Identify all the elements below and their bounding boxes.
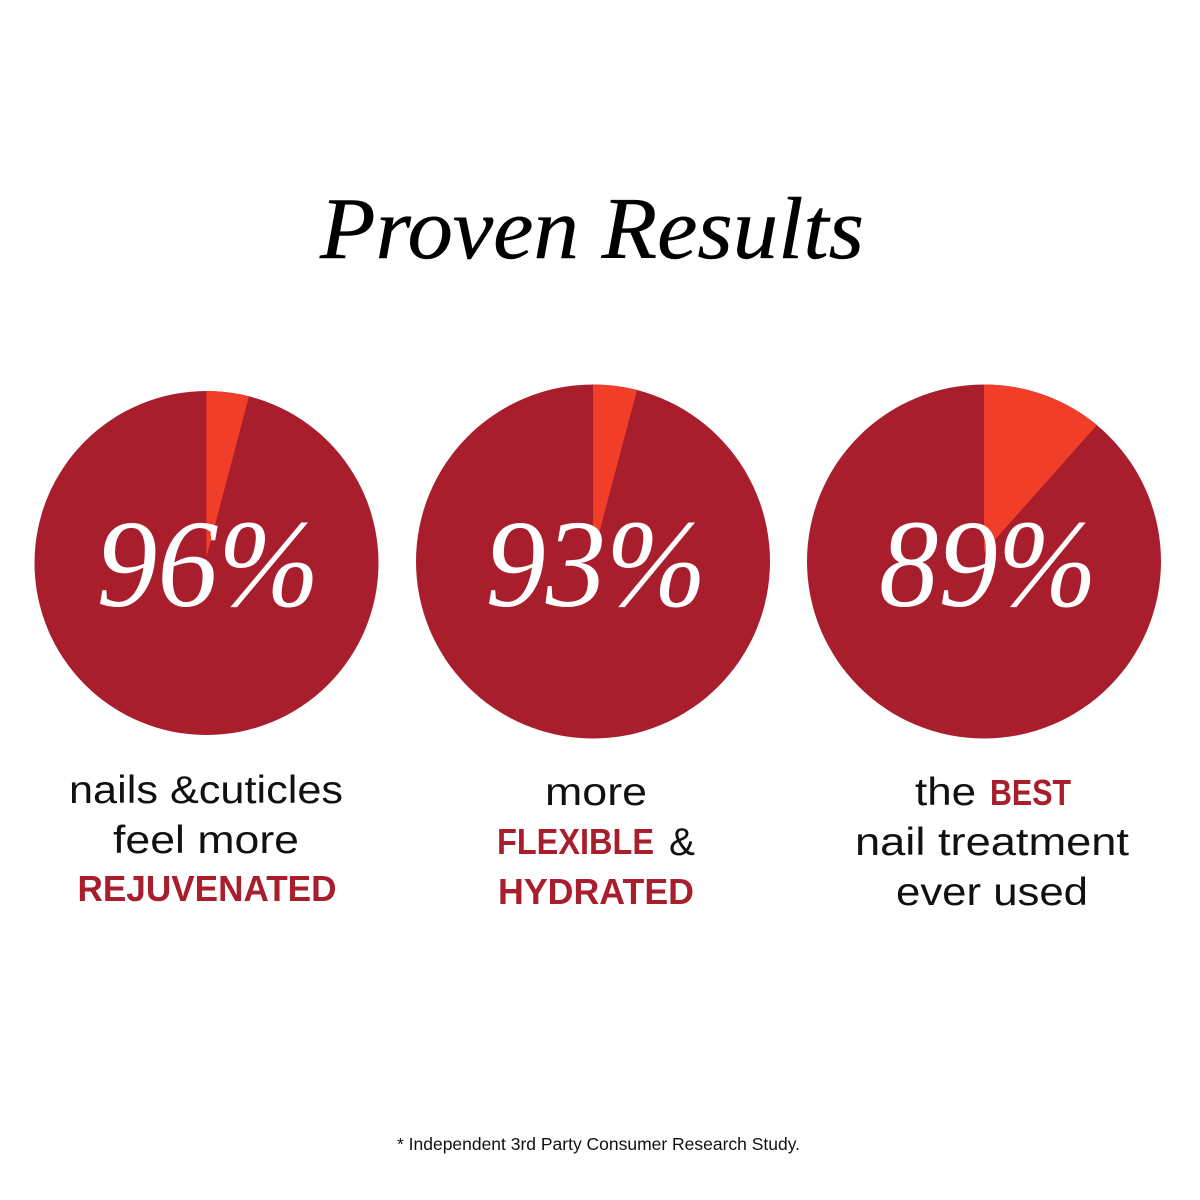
caption: rejuvenated: nails &cuticles	[69, 769, 343, 812]
pie chart: 96%	[34, 391, 378, 735]
caption: flexible and hydrated: HYDRATED	[498, 871, 694, 912]
caption: best nail treatment: BEST	[990, 772, 1071, 813]
caption: best nail treatment: ever used	[896, 871, 1088, 914]
caption: best nail treatment	[855, 771, 1129, 914]
caption: flexible and hydrated: more	[545, 771, 647, 814]
value: 89%: 89%	[879, 496, 1097, 634]
caption: rejuvenated: feel more	[113, 819, 299, 862]
pie chart: 93%	[416, 384, 770, 738]
title: Proven Results	[319, 181, 864, 278]
panel: 89%	[807, 384, 1161, 914]
caption: flexible and hydrated: &	[669, 821, 695, 864]
value: 96%: 96%	[96, 496, 320, 634]
caption: rejuvenated: REJUVENATED	[78, 868, 336, 909]
panel: 96%	[34, 391, 378, 909]
footnote: * Independent 3rd Party Consumer Research Study.	[397, 1134, 800, 1154]
value: 93%: 93%	[486, 496, 706, 634]
caption: best nail treatment: the	[915, 771, 976, 814]
pie chart: 89%	[807, 384, 1161, 738]
caption: best nail treatment: nail treatment	[855, 821, 1129, 864]
caption: flexible and hydrated: FLEXIBLE	[497, 821, 654, 862]
panel: 93%	[416, 384, 770, 912]
caption: rejuvenated	[69, 769, 343, 909]
caption: flexible and hydrated	[497, 771, 695, 912]
